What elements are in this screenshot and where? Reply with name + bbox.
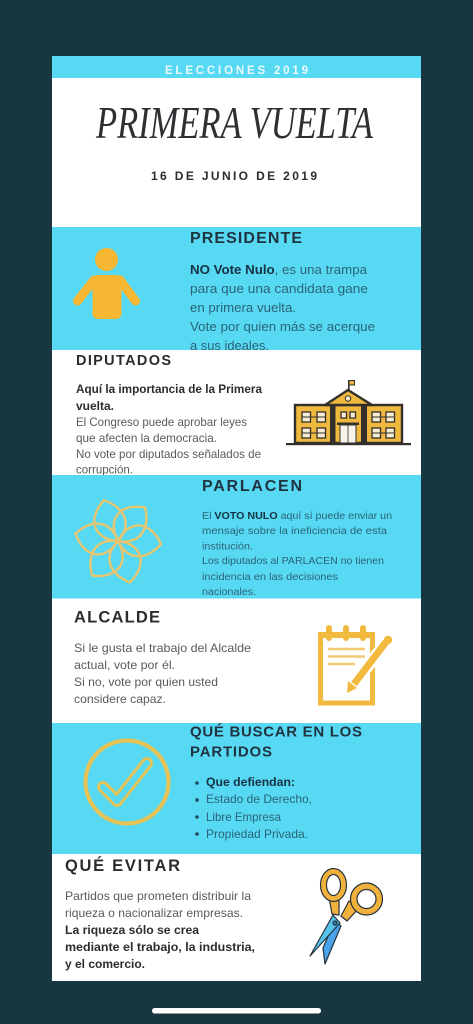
- list: que defiendan: Estado de Derecho,: [206, 792, 312, 806]
- icon: scissors: [310, 868, 382, 964]
- text: diputados: No vote por diputados señalados de: [76, 447, 261, 461]
- text: que evitar: mediante el trabajo, la industria,: [65, 940, 255, 954]
- text: presidente: a sus ideales.: [190, 339, 269, 353]
- heading: presidente: PRESIDENTE: [190, 230, 302, 247]
- home indicator bar: [152, 1008, 321, 1014]
- text: alcalde: actual, vote por él.: [74, 658, 175, 672]
- text: diputados: El Congreso puede aprobar leyes: [76, 415, 247, 429]
- heading: alcalde: ALCALDE: [74, 608, 160, 626]
- text: alcalde: Si le gusta el trabajo del Alcalde: [74, 641, 251, 655]
- text: que evitar: [65, 889, 255, 971]
- text: diputados: que afecten la democracia.: [76, 431, 217, 445]
- text: alcalde: Si no, vote por quien usted: [74, 675, 218, 689]
- list: que defiendan: Libre Empresa: [206, 810, 281, 824]
- text: diputados: vuelta.: [76, 399, 114, 413]
- panel: diputados: [52, 350, 421, 476]
- heading: parlacen: PARLACEN: [202, 478, 302, 495]
- heading: que buscar en los partidos: PARTIDOS: [190, 744, 272, 760]
- text: que evitar: y el comercio.: [65, 957, 145, 971]
- list: que defiendan: Que defiendan:: [206, 775, 295, 789]
- panel: que buscar: [52, 723, 421, 854]
- eyebrow: elecciones 2019: ELECCIONES 2019: [165, 65, 308, 77]
- text: que evitar: Partidos que prometen distribuir la: [65, 889, 251, 903]
- panel: presidente: [52, 227, 421, 353]
- icon: check in circle: [86, 740, 168, 824]
- text: presidente: para que una candidata gane: [190, 282, 368, 296]
- text: que evitar: La riqueza sólo se crea: [65, 923, 199, 937]
- text: diputados: [76, 382, 262, 476]
- icon: government building: [286, 380, 411, 445]
- heading: que buscar en los partidos: [190, 724, 362, 760]
- text: presidente: NO Vote Nulo , es una trampa: [190, 263, 367, 277]
- heading: que evitar: QUÉ EVITAR: [65, 856, 180, 875]
- text: que evitar: riqueza o nacionalizar empresas.: [65, 906, 243, 920]
- text: presidente: [190, 263, 375, 353]
- text: alcalde: considere capaz.: [74, 692, 166, 706]
- heading: que buscar en los partidos: QUÉ BUSCAR EN LOS: [190, 724, 362, 740]
- text: parlacen: nacionales.: [202, 586, 256, 598]
- panel: parlacen: [52, 475, 421, 599]
- title: PRIMERA VUELTA: [95, 97, 374, 148]
- icon: notepad and pencil: [318, 628, 392, 703]
- icon: flower outline: [72, 496, 163, 586]
- list: que defiendan: Propiedad Privada.: [206, 827, 308, 841]
- list: que defiendan: [195, 775, 312, 841]
- text: parlacen: Los diputados al PARLACEN no tienen: [202, 555, 384, 567]
- text: alcalde: [74, 641, 251, 706]
- text: parlacen: El VOTO NULO aquí sí puede enviar un: [202, 510, 392, 522]
- text: parlacen: [202, 510, 392, 598]
- text: presidente: en primera vuelta.: [190, 301, 296, 315]
- panel: header: [52, 56, 421, 228]
- text: diputados: Aquí la importancia de la Primera: [76, 382, 262, 396]
- text: parlacen: mensaje sobre la ineficiencia de esta: [202, 525, 387, 537]
- date: 16 DE JUNIO DE 2019: [151, 169, 317, 183]
- panel: alcalde: [52, 598, 421, 724]
- text: parlacen: incidencia en las decisiones: [202, 571, 338, 583]
- text: presidente: Vote por quien más se acerque: [190, 320, 375, 334]
- icon: person: [78, 248, 136, 319]
- heading: diputados: DIPUTADOS: [76, 353, 171, 369]
- text: diputados: corrupción.: [76, 462, 133, 476]
- text: parlacen: institución.: [202, 540, 253, 552]
- panel: que evitar: [52, 854, 421, 981]
